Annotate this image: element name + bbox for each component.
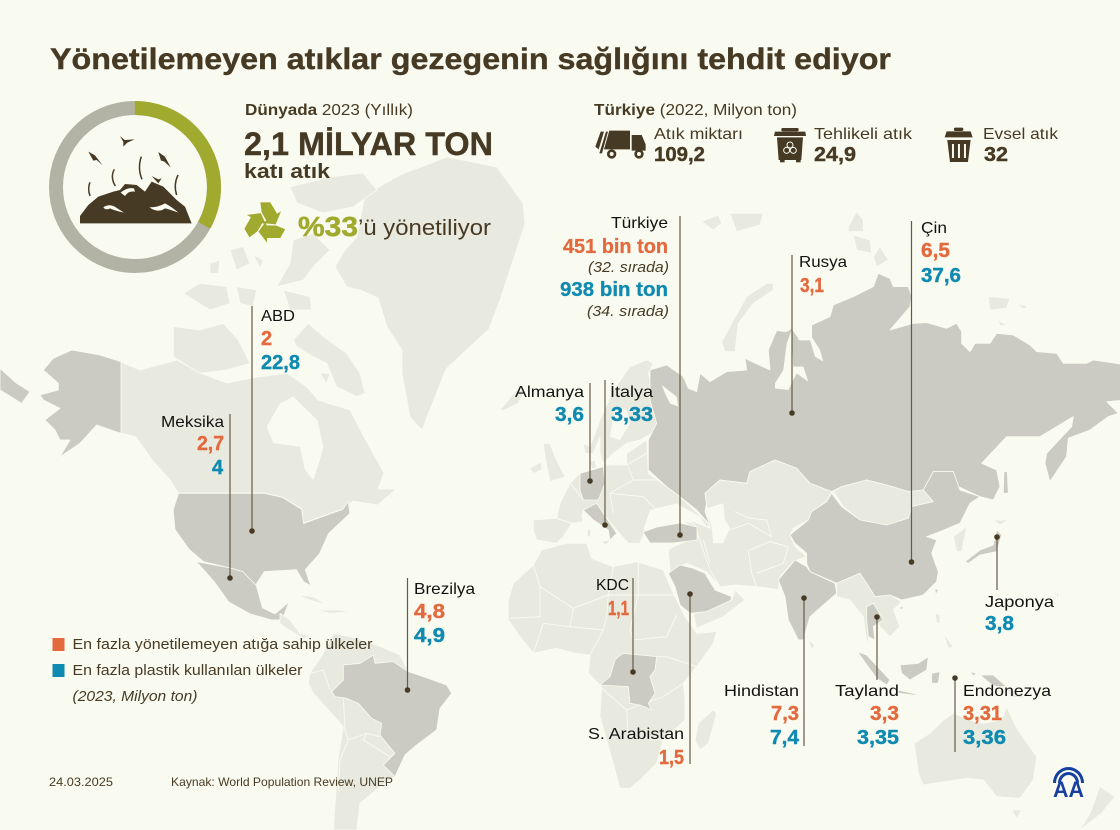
Africa — [508, 543, 717, 788]
callout: Hindistan — [724, 595, 807, 749]
Evsel atık stat — [983, 126, 1059, 166]
callout: Almanya: 3,6 — [555, 404, 584, 426]
callout: Tayland — [835, 614, 899, 749]
managed share: %33 — [298, 211, 358, 242]
China — [790, 472, 980, 600]
callout: KDC: KDC — [596, 577, 629, 594]
icon: garbage truck — [595, 131, 646, 159]
callout: Türkiye: 938 bin ton — [560, 279, 668, 301]
callout: Endonezya: Endonezya — [963, 683, 1051, 700]
callout: Brezilya: Brezilya — [414, 581, 475, 598]
icon: trash can — [945, 128, 973, 162]
callout: Çin: 6,5 — [921, 240, 950, 262]
callout: Rusya — [789, 254, 847, 416]
callout: ABD — [249, 306, 300, 534]
callout: Meksika: Meksika — [161, 414, 224, 431]
callout: Hindistan: Hindistan — [724, 683, 799, 700]
callout: Türkiye: Türkiye — [611, 215, 668, 232]
Atık miktarı stat: 109,2 — [654, 144, 705, 166]
Mongolia — [833, 480, 933, 525]
Atık miktarı stat: Atık miktarı — [654, 126, 743, 143]
callout: KDC: 1,1 — [608, 598, 629, 620]
Saudi Arabia — [668, 565, 732, 613]
callout: Almanya: Almanya — [515, 384, 584, 401]
Türkiye — [643, 523, 697, 543]
callout: Japonya: Japonya — [985, 594, 1054, 611]
callout: Endonezya — [952, 675, 1051, 752]
source: Kaynak: World Population Review, UNEP — [171, 775, 393, 789]
callout: Çin: Çin — [921, 220, 947, 237]
Tehlikeli atık stat — [814, 126, 913, 166]
callout: Çin: 37,6 — [921, 265, 961, 287]
callout: Brezilya: 4,9 — [414, 625, 445, 647]
callout: Türkiye: (32. sırada) — [588, 259, 669, 276]
callout: Meksika: 4 — [212, 457, 224, 479]
Southeast Asia mainland — [837, 573, 902, 653]
world total: 2,1 MİLYAR TON — [244, 126, 493, 162]
callout: İtalya: 3,33 — [611, 404, 653, 426]
India — [778, 560, 837, 640]
callout: Endonezya: 3,31 — [963, 703, 1002, 725]
Canada mainland and Hudson Bay — [121, 173, 396, 523]
icon: biohazard bin — [774, 128, 806, 162]
callout: S. Arabistan — [588, 591, 693, 769]
callout: Meksika: 2,7 — [197, 433, 224, 455]
Russia, Asia and Middle East — [643, 212, 1120, 653]
managed share caption: ’ü yönetiliyor — [358, 215, 491, 240]
callout: S. Arabistan: S. Arabistan — [588, 726, 684, 743]
Central Asia and Iran — [690, 460, 832, 590]
callout: Tayland: 3,3 — [870, 703, 899, 725]
callout: Brezilya: 4,8 — [414, 601, 445, 623]
callout: ABD: 22,8 — [261, 352, 300, 374]
Europe — [500, 360, 710, 545]
callout: ABD: 2 — [261, 328, 272, 350]
date: 24.03.2025 — [49, 775, 113, 789]
callout: KDC — [596, 577, 636, 675]
world stat heading: Dünyada 2023 (Yıllık) — [245, 102, 413, 119]
callout: Çin — [909, 220, 961, 565]
callout: Türkiye: (34. sırada) — [587, 303, 669, 320]
callout: İtalya — [602, 380, 653, 528]
Atık miktarı stat — [654, 126, 743, 166]
Japan, Korea and Oceania — [857, 520, 1115, 830]
callout: Brezilya — [405, 578, 475, 693]
callout: Meksika — [161, 414, 233, 581]
icon: garbage pile with birds — [80, 136, 192, 223]
Tehlikeli atık stat: 24,9 — [814, 144, 856, 166]
USA and Mexico — [173, 493, 350, 620]
callout: Endonezya: 3,36 — [963, 727, 1006, 749]
callout: İtalya: İtalya — [610, 382, 653, 401]
callout: Japonya: 3,8 — [985, 613, 1014, 635]
Evsel atık stat: 32 — [984, 144, 1008, 166]
Canadian Arctic islands — [173, 233, 365, 397]
Türkiye heading: Türkiye (2022, Milyon ton) — [594, 102, 797, 119]
legend: En fazla plastik kullanılan ülkeler — [72, 662, 302, 679]
South America — [280, 595, 452, 830]
callout: Türkiye — [560, 215, 683, 538]
Evsel atık stat: Evsel atık — [983, 126, 1059, 143]
callout: Rusya: Rusya — [799, 254, 847, 271]
legend: En fazla yönetilemeyen atığa sahip ülkeler — [72, 636, 372, 653]
callout: Almanya — [515, 383, 593, 484]
callout: Rusya: 3,1 — [800, 275, 824, 297]
donut chart: 33 percent managed — [56, 108, 214, 266]
AA logo: AA — [1053, 777, 1084, 802]
icon: recycle — [239, 202, 285, 247]
legend — [52, 636, 372, 705]
Alaska and Chukotka — [0, 350, 121, 465]
title: Yönetilemeyen atıklar gezegenin sağlığını tehdit ediyor — [50, 43, 891, 76]
callout: Tayland: Tayland — [835, 683, 899, 700]
callout: Tayland: 3,35 — [857, 727, 899, 749]
Tehlikeli atık stat: Tehlikeli atık — [814, 126, 913, 143]
callout: Japonya — [985, 534, 1054, 635]
Greenland — [335, 157, 525, 430]
callout: ABD: ABD — [261, 308, 295, 325]
callout: Hindistan: 7,3 — [771, 703, 799, 725]
legend: (2023, Milyon ton) — [72, 688, 198, 705]
callout: Hindistan: 7,4 — [770, 727, 800, 749]
callout: S. Arabistan: 1,5 — [659, 747, 684, 769]
callout: Türkiye: 451 bin ton — [563, 236, 668, 258]
solid waste label: katı atık — [244, 161, 331, 183]
